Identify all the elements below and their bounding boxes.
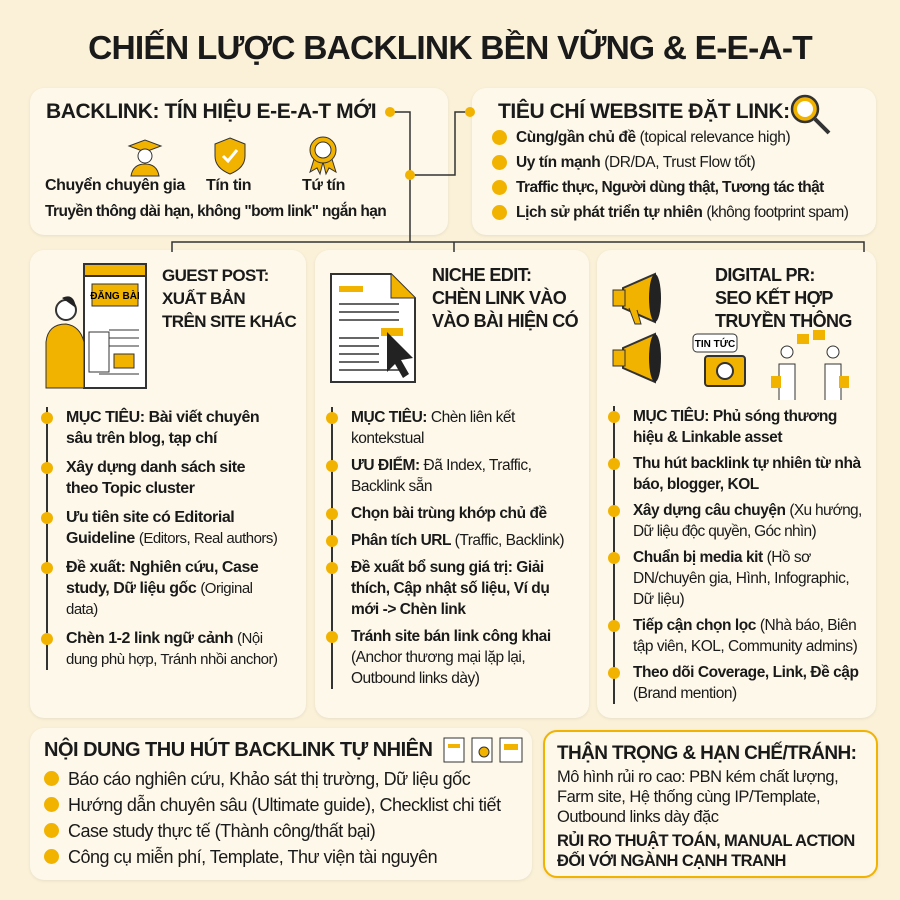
illustration: megaphones and people: TIN TỨC [695, 337, 735, 350]
heading [715, 265, 852, 331]
heading: TRUYỀN THÔNG [715, 311, 852, 331]
text: Mô hình rủi ro cao: PBN kém chất lượng, [557, 768, 838, 786]
bullet list: MỤC TIÊU: Chèn liên kết kontekstual [351, 409, 515, 447]
heading: XUẤT BẢN [162, 289, 245, 308]
bullet list: Chọn bài trùng khớp chủ đề [351, 505, 547, 522]
bullet list [331, 407, 577, 689]
heading [432, 265, 578, 331]
connector lines [171, 107, 865, 252]
panel: caution [543, 730, 878, 878]
panel: backlink E-E-A-T signal: Tín tin [206, 177, 251, 194]
panel: backlink E-E-A-T signal: Tứ tín [302, 177, 345, 194]
warning [557, 831, 855, 870]
icon: badge [309, 136, 337, 176]
text [557, 768, 838, 826]
illustration: megaphones and people [612, 272, 746, 387]
title: CHIẾN LƯỢC BACKLINK BỀN VỮNG & E-E-A-T [88, 30, 812, 67]
illustration: person with article [46, 263, 147, 389]
bullet list: ƯU ĐIỂM: Đã Index, Traffic, Backlink sẵn [351, 457, 531, 495]
content list: Case study thực tế (Thành công/thất bại) [68, 821, 375, 841]
panel: digital PR [597, 250, 876, 718]
content list: Hướng dẫn chuyên sâu (Ultimate guide), Checklist chi tiết [68, 795, 501, 815]
heading: DIGITAL PR: [715, 265, 815, 285]
content list: Báo cáo nghiên cứu, Khảo sát thị trường, Dữ liệu gốc [68, 769, 470, 789]
panel: linkable content [30, 728, 532, 880]
criteria list: Cùng/gần chủ đề (topical relevance high) [516, 129, 790, 146]
heading: THẬN TRỌNG & HẠN CHẾ/TRÁNH: [557, 743, 856, 764]
bullet list [613, 406, 865, 704]
criteria list [492, 129, 848, 221]
bullet list: MỤC TIÊU: Phủ sóng thương hiệu & Linkable asset [633, 408, 837, 446]
panel: niche edit [315, 250, 589, 718]
heading: VÀO BÀI HIỆN CÓ [432, 311, 578, 331]
icons: documents [444, 738, 522, 762]
bullet list: Đề xuất: Nghiên cứu, Case study, Dữ liệu gốc (Original data) [66, 559, 258, 618]
heading: SEO KẾT HỢP [715, 288, 833, 308]
icon: expert [128, 140, 162, 176]
heading: NICHE EDIT: [432, 265, 531, 285]
panel: website criteria [472, 88, 876, 235]
bullet list: Tiếp cận chọn lọc (Nhà báo, Biên tập viên, KOL, Community admins) [633, 617, 857, 655]
text: Farm site, Hệ thống cùng IP/Template, [557, 788, 820, 806]
warning: ĐỐI VỚI NGÀNH CẠNH TRANH [557, 852, 786, 870]
panel: guest post [30, 250, 306, 718]
bullet list: Ưu tiên site có Editorial Guideline (Editors, Real authors) [66, 509, 277, 547]
illustration: person with article: ĐĂNG BÀI [90, 289, 140, 302]
heading: NỘI DUNG THU HÚT BACKLINK TỰ NHIÊN [44, 739, 432, 761]
heading: GUEST POST: [162, 266, 269, 285]
icon: magnifier [790, 94, 830, 134]
bullet list: Tránh site bán link công khai (Anchor thương mại lặp lại, Outbound links dày) [351, 628, 551, 687]
bullet list: Chèn 1-2 link ngữ cảnh (Nội dung phù hợp, Tránh nhồi anchor) [66, 630, 278, 668]
text: Outbound links dày đặc [557, 808, 718, 826]
bullet list: Thu hút backlink tự nhiên từ nhà báo, blogger, KOL [633, 455, 861, 493]
bullet list: Phân tích URL (Traffic, Backlink) [351, 532, 564, 549]
heading: TRÊN SITE KHÁC [162, 312, 296, 331]
bullet list: Xây dựng danh sách site theo Topic cluster [66, 459, 245, 497]
warning: RỦI RO THUẬT TOÁN, MANUAL ACTION [557, 832, 855, 850]
criteria list: Traffic thực, Người dùng thật, Tương tác thật [516, 179, 824, 196]
bullet list: Chuẩn bị media kit (Hồ sơ DN/chuyên gia, Hình, Infographic, Dữ liệu) [633, 549, 849, 608]
bullet list: MỤC TIÊU: Bài viết chuyên sâu trên blog, tạp chí [66, 409, 259, 447]
heading: CHÈN LINK VÀO [432, 288, 566, 308]
criteria list: Uy tín mạnh (DR/DA, Trust Flow tốt) [516, 154, 755, 171]
heading: BACKLINK: TÍN HIỆU E-E-A-T MỚI [46, 100, 376, 123]
text: Truyền thông dài hạn, không "bơm link" ngắn hạn [45, 203, 386, 220]
icon: shield [214, 138, 246, 174]
criteria list: Lịch sử phát triển tự nhiên (không footprint spam) [516, 204, 848, 221]
content list [44, 769, 501, 867]
panel: backlink E-E-A-T signal [30, 88, 448, 235]
bullet list: Theo dõi Coverage, Link, Đề cập (Brand mention) [633, 664, 858, 702]
bullet list [46, 407, 278, 670]
icon labels: Chuyển chuyên gia [45, 177, 185, 194]
bullet list: Xây dựng câu chuyện (Xu hướng, Dữ liệu độc quyền, Góc nhìn) [633, 502, 862, 540]
content list: Công cụ miễn phí, Template, Thư viện tài nguyên [68, 847, 437, 867]
heading: TIÊU CHÍ WEBSITE ĐẶT LINK: [498, 100, 790, 123]
bullet list: Đề xuất bổ sung giá trị: Giải thích, Cập nhật số liệu, Ví dụ mới -> Chèn link [351, 559, 549, 618]
heading [162, 266, 296, 331]
illustration: document with cursor [330, 273, 416, 383]
